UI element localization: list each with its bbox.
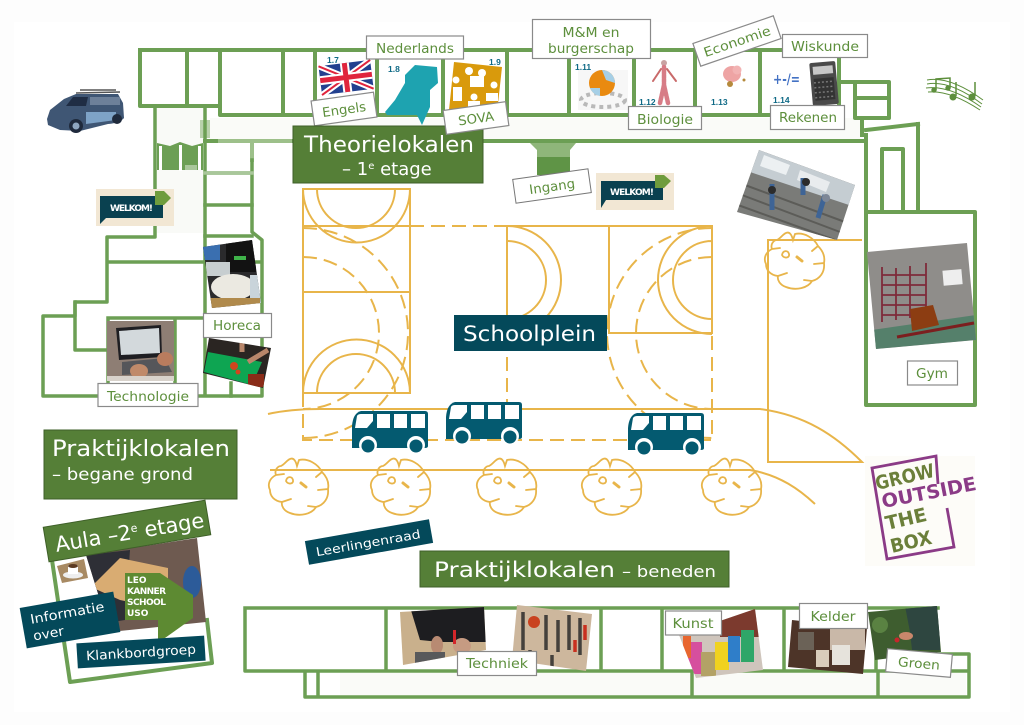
logo: Leo Kanner School USO: SCHOOL	[127, 598, 166, 608]
corridor tints	[157, 108, 966, 695]
heading: Schoolplein	[454, 315, 607, 351]
label: Kelder: Kelder	[810, 610, 856, 625]
room number 1.13: 1.13	[711, 97, 728, 107]
label: Nederlands: Nederlands	[376, 42, 454, 57]
button: Klankbordgroep: Klankbordgroep	[86, 643, 196, 664]
photo: gym	[867, 243, 976, 349]
road and parking lines	[268, 240, 862, 504]
left stairs	[157, 120, 210, 171]
logo: Grow outside the box	[865, 456, 978, 566]
heading: Praktijklokalen begane grond	[44, 430, 237, 499]
heading: Praktijklokalen beneden: Praktijklokalen	[434, 558, 615, 582]
photo: cutting vegetables	[203, 338, 271, 388]
label: Techniek	[458, 652, 536, 676]
label: Rekenen: Rekenen	[779, 111, 837, 126]
logo: Leo Kanner School USO: LEO	[127, 576, 147, 586]
label: Gym: Gym	[916, 367, 948, 382]
photo: basement room	[788, 620, 867, 674]
aula outline	[52, 560, 212, 682]
photo: tools person	[400, 607, 486, 665]
heading: Praktijklokalen begane grond: – begane grond	[52, 465, 193, 485]
label: Kunst	[666, 611, 722, 635]
label: SOVA	[443, 102, 509, 134]
label: Techniek: Techniek	[465, 657, 529, 672]
heading: Theorielokalen 1e etage: e	[368, 161, 374, 172]
label: Gym	[908, 361, 958, 385]
label: Ingang	[513, 169, 591, 203]
label: Biologie	[628, 106, 702, 130]
icon: math symbols: +-/=	[773, 72, 800, 88]
photo: tool wall	[512, 605, 592, 671]
photo: students on the steps	[737, 150, 855, 240]
button: Leerlingenraad: Leerlingenraad	[315, 527, 422, 559]
label: Groen: Groen	[897, 655, 940, 674]
button: Klankbordgroep	[76, 636, 206, 668]
icon: SOVA group tile	[449, 62, 502, 110]
photo: paint bottles	[679, 609, 763, 678]
heading: Aula 2e etage: Aula –2	[53, 520, 133, 557]
heading: Theorielokalen 1e etage: etage	[374, 159, 432, 180]
sign: Welkom left: WELKOM!	[110, 204, 153, 214]
room number 1.12: 1.12	[639, 97, 656, 107]
label: Wiskunde: Wiskunde	[791, 40, 859, 55]
room number 1.9: 1.9	[489, 57, 501, 67]
left wing	[43, 108, 262, 396]
room number 1.8: 1.8	[388, 64, 400, 74]
logo: Leo Kanner School USO: USO	[127, 609, 149, 619]
logo: Grow outside the box: THE	[883, 504, 929, 535]
icon: human body	[653, 60, 676, 103]
icon: UK flag	[318, 60, 374, 95]
heading: Theorielokalen 1e etage: Theorielokalen	[303, 133, 474, 158]
logo: Grow outside the box: BOX	[888, 527, 934, 558]
sign: Welkom left	[96, 189, 174, 226]
icon: van	[47, 90, 124, 133]
icon: piggy bank	[723, 66, 746, 87]
label: Economie	[693, 16, 781, 66]
room number 1.11: 1.11	[575, 62, 591, 72]
icon: map of the Netherlands	[385, 65, 438, 125]
button: Informatie over: over	[32, 624, 66, 644]
heading: Praktijklokalen beneden: – beneden	[622, 562, 716, 581]
sign: Welkom centre	[596, 173, 674, 210]
top wing	[140, 50, 840, 118]
label: Technologie: Technologie	[106, 390, 189, 405]
label: Technologie	[98, 384, 198, 406]
label: Ingang: Ingang	[528, 177, 576, 198]
logo: Grow outside the box: GROW	[873, 460, 937, 495]
photo: gardening	[868, 606, 941, 660]
button: Informatie over	[20, 592, 120, 648]
trees	[269, 233, 824, 515]
label: Groen	[886, 649, 952, 677]
label: Engels	[311, 92, 377, 126]
label: Horeca	[204, 314, 272, 338]
photo: aula	[86, 538, 206, 631]
sign: Welkom centre: WELKOM!	[610, 188, 654, 198]
logo: Leo Kanner School USO: KANNER	[127, 587, 166, 597]
label: Engels: Engels	[321, 100, 367, 121]
label: SOVA: SOVA	[457, 110, 495, 129]
heading: Theorielokalen 1e etage	[293, 126, 483, 183]
icon: calculator	[809, 61, 839, 106]
photo: coffee cup	[57, 559, 88, 583]
entrance steps	[530, 143, 576, 175]
bottom wing	[245, 608, 969, 697]
room number 1.7: 1.7	[327, 55, 339, 65]
photo: cooking	[203, 240, 261, 308]
label: M&M en burgerschap: M&M en	[562, 26, 620, 41]
label: Horeca: Horeca	[213, 319, 261, 334]
button: Leerlingenraad	[305, 519, 433, 565]
label: Rekenen	[770, 106, 844, 130]
heading: Praktijklokalen begane grond: Praktijklokalen	[52, 437, 230, 462]
buses	[352, 402, 704, 456]
icon: music notes	[926, 78, 983, 110]
label: Kunst: Kunst	[672, 617, 714, 632]
label: M&M en burgerschap: burgerschap	[548, 42, 634, 57]
logo: Leo Kanner School USO	[125, 573, 193, 643]
label: Nederlands	[366, 36, 464, 59]
schoolyard: sports courts	[303, 189, 712, 440]
photo: laptop	[107, 321, 174, 381]
label: Economie: Economie	[702, 24, 773, 61]
heading: Aula 2e etage: e	[130, 521, 139, 535]
room number 1.14: 1.14	[773, 95, 790, 105]
icon: globe with people	[578, 70, 628, 110]
heading: Aula 2e etage	[43, 500, 211, 562]
heading: Theorielokalen 1e etage: – 1	[342, 159, 368, 180]
label: M&M en burgerschap	[532, 20, 650, 58]
heading: Aula 2e etage: etage	[136, 508, 206, 543]
label: Kelder	[800, 604, 868, 628]
right wing and gym	[866, 124, 975, 405]
label: Biologie: Biologie	[637, 113, 693, 128]
heading: Schoolplein: Schoolplein	[463, 322, 596, 346]
button: Informatie over: Informatie	[29, 600, 106, 628]
logo: Grow outside the box: OUTSIDE	[880, 473, 978, 513]
label: Wiskunde	[782, 34, 868, 58]
heading: Praktijklokalen beneden	[420, 551, 729, 587]
